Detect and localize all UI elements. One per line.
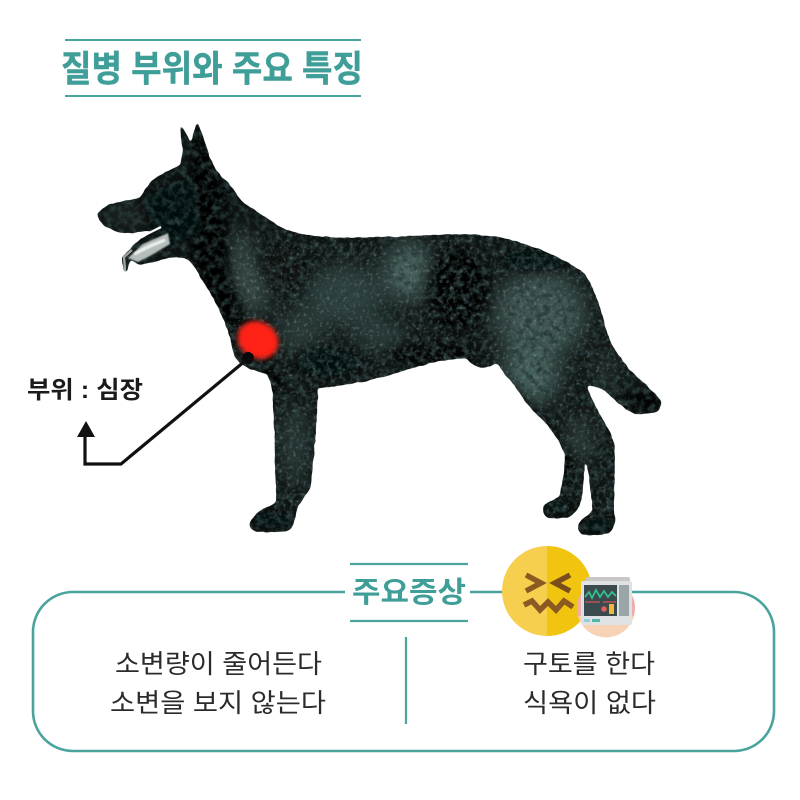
heart highlight	[231, 314, 285, 366]
dog tongue and teeth	[128, 233, 170, 262]
symptoms right: 구토를 한다	[523, 649, 655, 679]
panel heading	[350, 564, 468, 621]
symptoms left: 소변량이 줄어든다	[115, 649, 322, 679]
panel heading: 주요증상	[352, 576, 466, 609]
panel: main symptoms	[33, 564, 774, 751]
arrow: leader line from heart to label	[77, 352, 254, 464]
symptoms right	[523, 649, 656, 718]
icon: nauseous face	[502, 546, 592, 636]
symptoms left: 소변을 보지 않는다	[110, 688, 326, 718]
dog illustration	[90, 120, 670, 540]
symptoms right: 식욕이 없다	[523, 688, 656, 718]
symptoms left	[110, 649, 326, 718]
location label: 부위 : 심장	[27, 377, 143, 404]
title: 질병 부위와 주요 특징	[61, 48, 363, 89]
icon: patient monitor	[577, 577, 635, 637]
